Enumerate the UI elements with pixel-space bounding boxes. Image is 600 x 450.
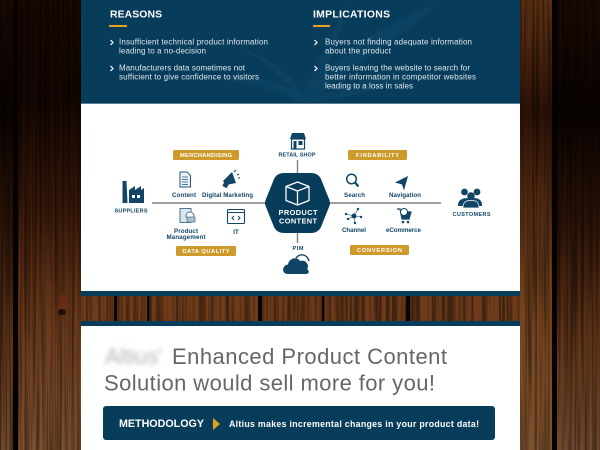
icon: channel: Channel bbox=[342, 227, 366, 234]
icon: navigation bbox=[389, 176, 421, 199]
icon: digital marketing: Digital Marketing bbox=[202, 192, 253, 199]
list: implications bbox=[314, 38, 476, 90]
icon: product management: Management bbox=[166, 234, 206, 241]
icon and label: suppliers bbox=[114, 181, 148, 214]
icon: search: Search bbox=[344, 192, 365, 199]
pill: data quality: DATA QUALITY bbox=[182, 249, 230, 255]
icon and label: suppliers: SUPPLIERS bbox=[114, 208, 148, 214]
icon: it: IT bbox=[233, 229, 239, 236]
icon: it bbox=[228, 210, 244, 236]
icon: ecommerce: eCommerce bbox=[386, 227, 422, 234]
heading: solution bbox=[104, 344, 447, 396]
heading: reasons: REASONS bbox=[110, 10, 162, 20]
icon: product management: Product bbox=[174, 228, 198, 235]
list: reasons: Insufficient technical product information bbox=[119, 38, 268, 46]
heading: reasons bbox=[109, 10, 162, 27]
arrow bbox=[213, 418, 220, 430]
list: reasons: Manufacturers data sometimes not bbox=[119, 64, 246, 72]
pill: merchandising: MERCHANDISING bbox=[180, 153, 233, 159]
icon and label: customers: CUSTOMERS bbox=[452, 212, 491, 218]
pill: findability bbox=[348, 150, 407, 160]
panel: reasons and implications bbox=[81, 0, 520, 104]
banner: methodology: METHODOLOGY bbox=[119, 418, 204, 430]
banner: methodology bbox=[103, 406, 495, 440]
heading: implications bbox=[313, 10, 390, 27]
icon: pim cloud: PIM bbox=[292, 246, 304, 252]
icon: product management bbox=[166, 208, 206, 241]
connector lines bbox=[152, 160, 441, 243]
hexagon: product content: PRODUCT bbox=[278, 208, 318, 217]
icon: ecommerce bbox=[386, 208, 422, 234]
list: reasons: sufficient to give confidence to visitors bbox=[119, 72, 259, 82]
heading: implications: IMPLICATIONS bbox=[313, 10, 390, 20]
list: implications: better information in competitor websites bbox=[325, 72, 476, 82]
list: implications: about the product bbox=[325, 46, 392, 56]
icon: content: Content bbox=[172, 192, 196, 199]
pill: merchandising bbox=[173, 150, 239, 160]
icon: navigation: Navigation bbox=[389, 192, 421, 199]
list: implications: leading to a loss in sales bbox=[325, 82, 413, 90]
list: reasons bbox=[110, 38, 268, 82]
icon: digital marketing bbox=[202, 170, 253, 199]
pill: conversion bbox=[350, 245, 409, 255]
heading: solution: Enhanced Product Content bbox=[172, 344, 447, 369]
icon: retail shop bbox=[278, 133, 316, 158]
heading: solution: Altius' bbox=[105, 344, 162, 369]
panel: solution bbox=[81, 321, 520, 450]
icon: retail shop: RETAIL SHOP bbox=[278, 152, 316, 158]
pill: conversion: CONVERSION bbox=[357, 248, 402, 254]
pill: findability: FINDABILITY bbox=[356, 153, 399, 159]
heading: solution: Solution would sell more for you! bbox=[104, 370, 435, 396]
icon: search bbox=[344, 174, 365, 199]
list: implications: Buyers leaving the website to search for bbox=[325, 64, 470, 72]
hexagon: product content bbox=[265, 173, 330, 233]
icon: channel bbox=[342, 208, 366, 234]
hexagon: product content: CONTENT bbox=[279, 216, 317, 226]
panel: diagram bbox=[81, 104, 520, 296]
pill: data quality bbox=[176, 246, 236, 256]
list: reasons: leading to a no-decision bbox=[119, 46, 206, 56]
icon: pim cloud bbox=[283, 246, 309, 274]
icon and label: customers bbox=[452, 189, 491, 218]
icon: content bbox=[172, 172, 196, 199]
list: implications: Buyers not finding adequate information bbox=[325, 38, 472, 46]
banner: methodology: Altius makes incremental changes in your product data! bbox=[229, 419, 479, 429]
